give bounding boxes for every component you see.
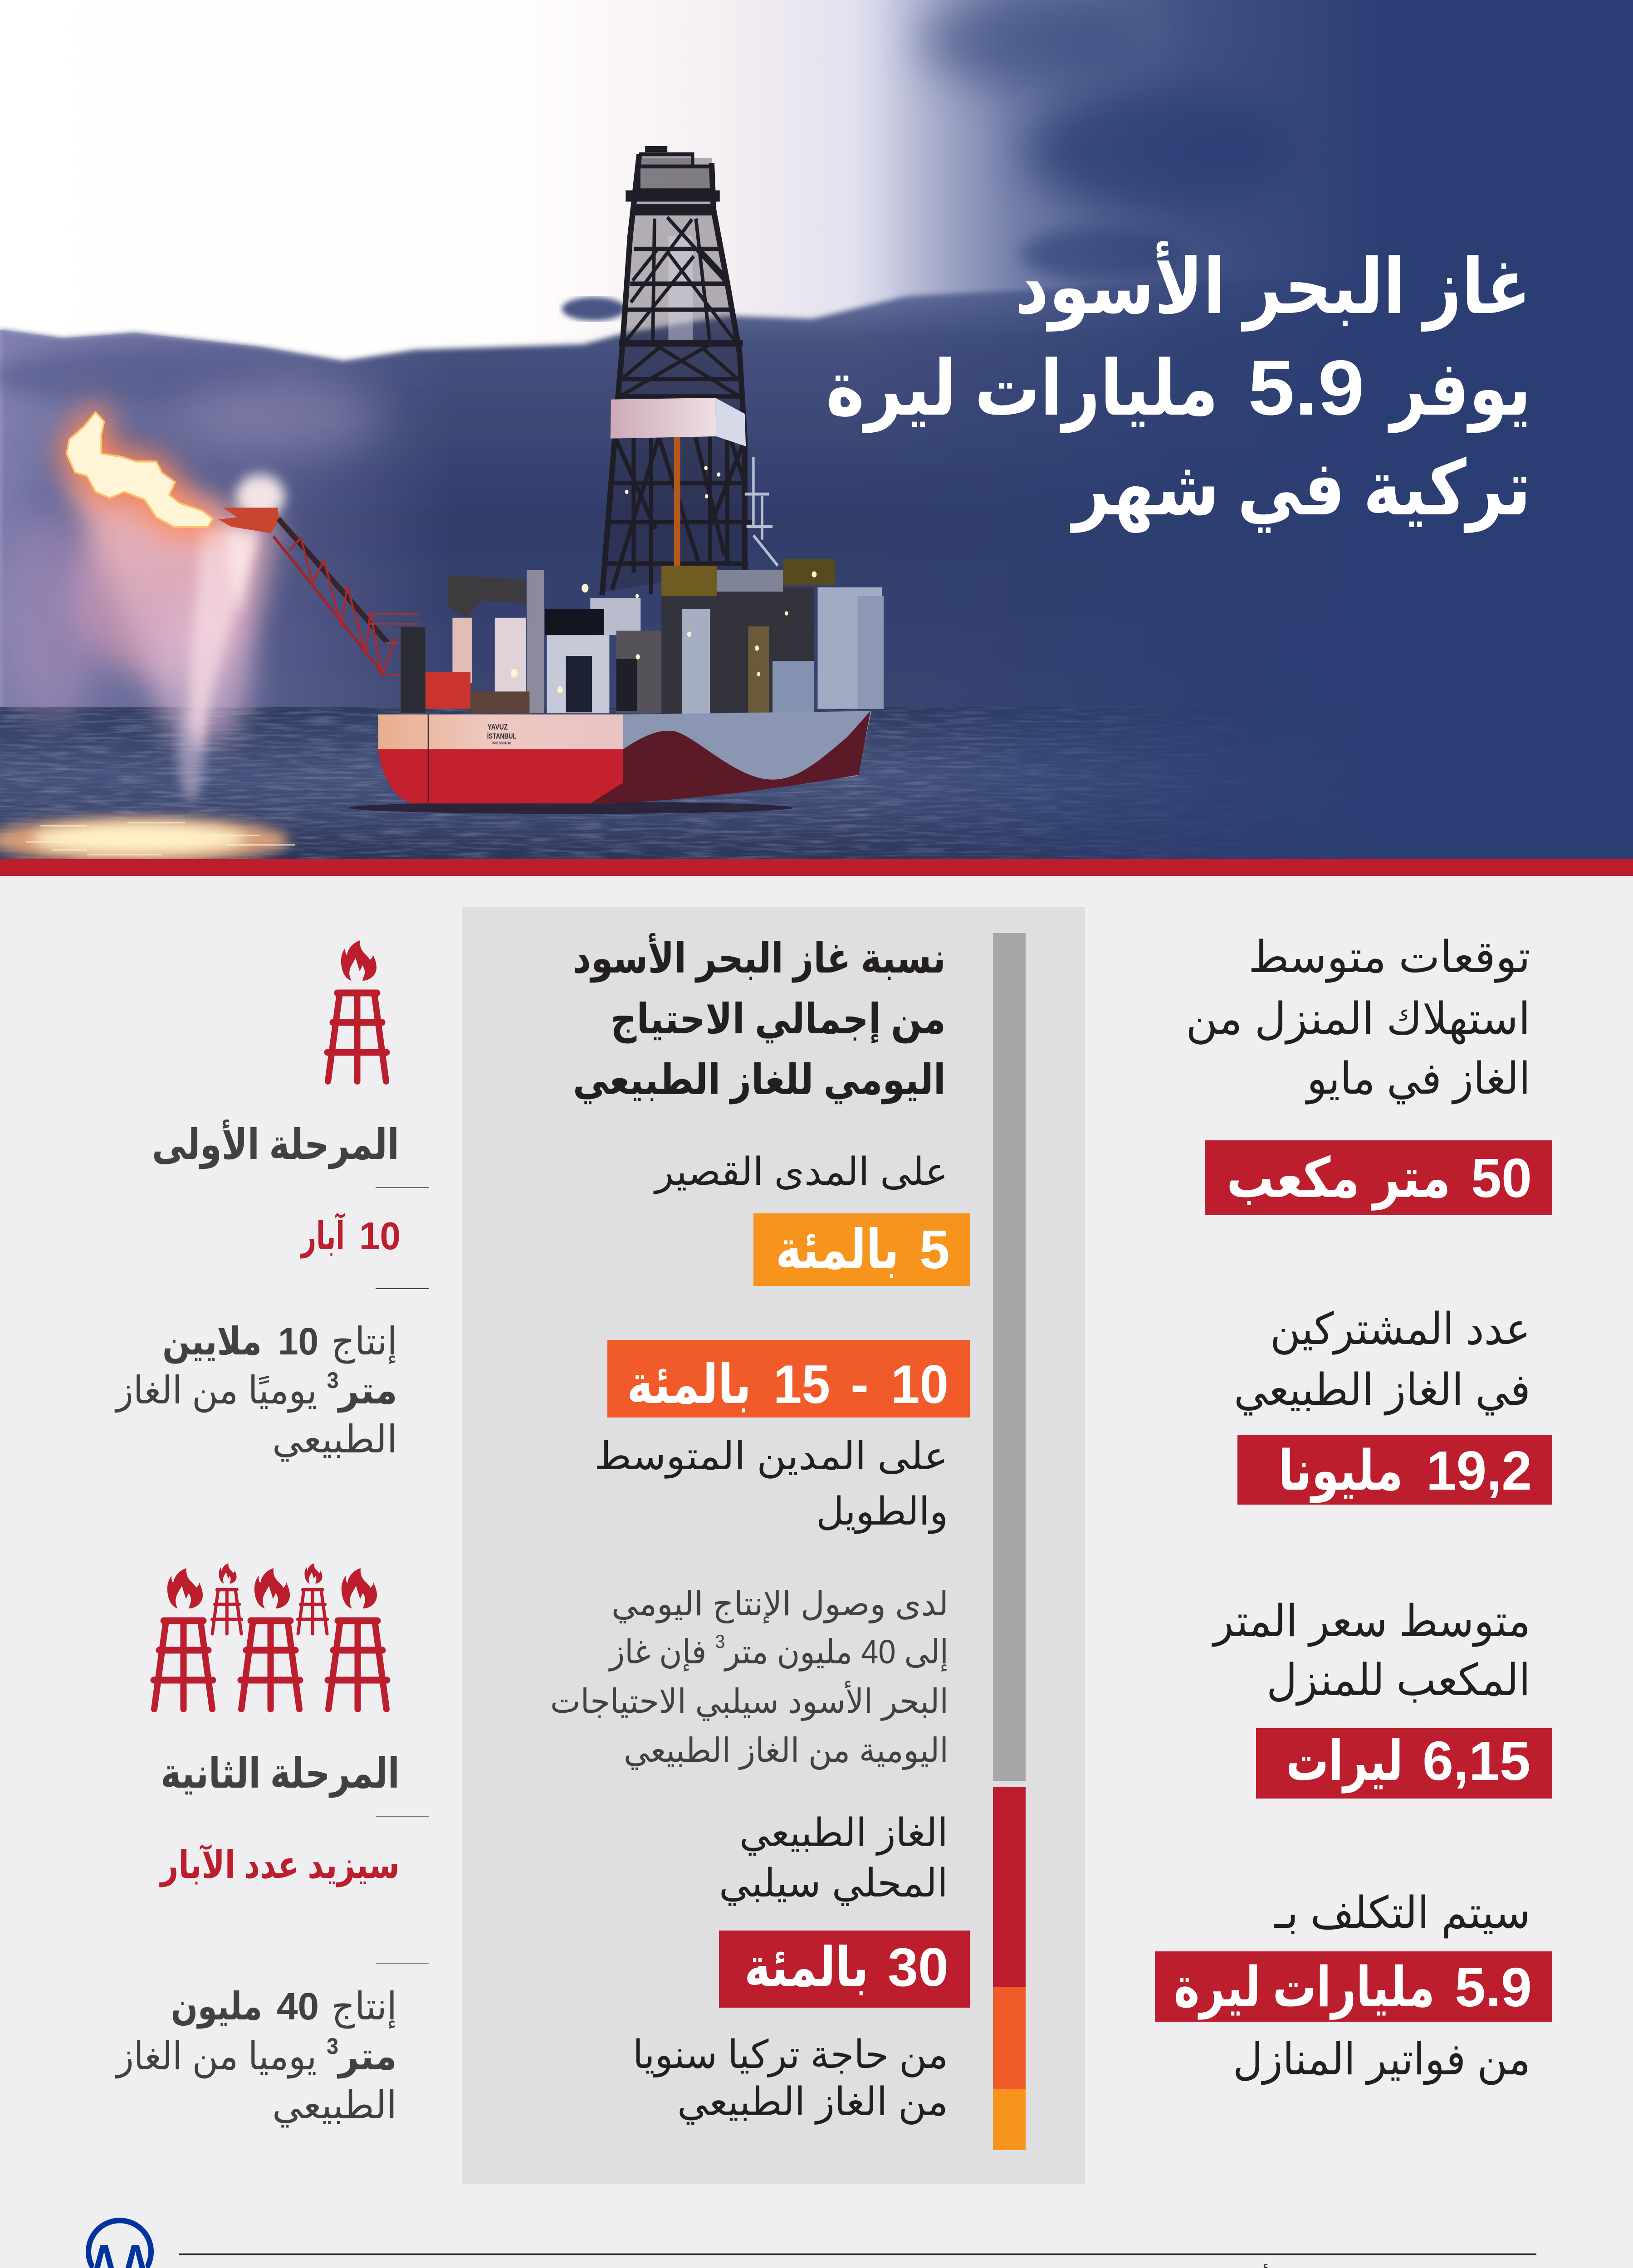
phase two: 40 xyxy=(277,1985,319,2028)
medium and long-term share: بالمئة xyxy=(627,1354,751,1415)
panel: share of Black Sea gas (centre) xyxy=(462,907,1085,2184)
footer xyxy=(88,2220,1539,2268)
phase two xyxy=(115,1563,429,2128)
panel heading: نسبة غاز البحر الأسود xyxy=(573,933,946,983)
annual share: من حاجة تركيا سنويا xyxy=(633,2033,948,2077)
stat: average price per cubic metre: المكعب للمنزل xyxy=(1266,1655,1530,1706)
drilling ship xyxy=(349,149,884,814)
stat: number of subscribers: 19,2 xyxy=(1426,1440,1532,1501)
stat: total bills covered: سيتم التكلف بـ xyxy=(1274,1888,1530,1938)
stat: expected monthly consumption xyxy=(1186,932,1552,1215)
stat: number of subscribers: مليونا xyxy=(1278,1440,1403,1503)
note on 40 million cubic metres: اليومية من الغاز الطبيعي xyxy=(624,1731,949,1770)
progress column xyxy=(993,933,1026,2150)
stat: average price per cubic metre xyxy=(1211,1596,1552,1799)
phase one: متر3 يوميًا من الغاز xyxy=(114,1368,397,1413)
stat: expected monthly consumption: توقعات متوسط xyxy=(1248,932,1530,983)
phase one xyxy=(114,940,429,1462)
medium and long-term share: والطويل xyxy=(816,1490,948,1534)
title: يوفر xyxy=(1388,346,1531,433)
note on 40 million cubic metres: البحر الأسود سيلبي الاحتياجات xyxy=(550,1681,949,1721)
logo: Anadolu Agency xyxy=(88,2220,151,2268)
phase two: الطبيعي xyxy=(272,2084,397,2128)
stat: expected monthly consumption: متر مكعب xyxy=(1227,1147,1451,1211)
annual share: 30 xyxy=(888,1937,949,1998)
red band under hero xyxy=(0,859,1633,876)
phase one: 10 xyxy=(278,1320,318,1363)
icon: single gas rig xyxy=(328,940,386,1081)
ship name: İSTANBUL xyxy=(487,732,517,741)
medium and long-term share: 10 xyxy=(891,1354,949,1415)
phase one: آبار xyxy=(300,1212,345,1259)
phase two: المرحلة الثانية xyxy=(161,1750,400,1798)
annual share: من الغاز الطبيعي xyxy=(677,2080,948,2125)
icon: multiple gas rigs xyxy=(154,1563,387,1709)
stat: expected monthly consumption: 50 xyxy=(1471,1147,1532,1209)
stat: total bills covered: 5.9 xyxy=(1455,1956,1532,2018)
note on 40 million cubic metres: لدى وصول الإنتاج اليومي xyxy=(611,1585,949,1623)
short-term share xyxy=(653,1150,970,1286)
annual share: بالمئة xyxy=(744,1937,869,1998)
title: تركية في شهر xyxy=(1070,445,1531,533)
ship name: YAVUZ xyxy=(488,723,508,732)
note on 40 million cubic metres xyxy=(550,1585,949,1770)
title: غاز البحر الأسود xyxy=(1015,241,1531,332)
medium and long-term share: 15 xyxy=(773,1354,830,1415)
panel heading xyxy=(573,933,946,1105)
phase one: 10 xyxy=(359,1215,401,1258)
annual share: الغاز الطبيعي xyxy=(739,1811,948,1856)
stat: total bills covered: مليارات ليرة xyxy=(1174,1956,1435,2020)
short-term share: 5 xyxy=(919,1219,950,1280)
title: 5.9 xyxy=(1248,344,1364,431)
phase two: متر3 يوميا من الغاز xyxy=(115,2033,397,2079)
ship name xyxy=(487,723,517,745)
medium and long-term share: - xyxy=(851,1354,869,1415)
phase one: ملايين xyxy=(162,1320,262,1364)
ship name: IMO 9503748 xyxy=(492,741,512,745)
derrick tower xyxy=(602,149,753,591)
short-term share: على المدى القصير xyxy=(653,1150,948,1194)
short-term share: بالمئة xyxy=(776,1219,899,1280)
stat: expected monthly consumption: الغاز في مايو xyxy=(1305,1054,1530,1105)
annual share: المحلي سيلبي xyxy=(719,1862,948,1906)
panel heading: اليومي للغاز الطبيعي xyxy=(573,1057,946,1105)
panel: production phases (left column) xyxy=(114,940,429,2128)
medium and long-term share xyxy=(594,1340,970,1534)
stat: number of subscribers: في الغاز الطبيعي xyxy=(1234,1365,1530,1416)
stat: average price per cubic metre: ليرات xyxy=(1286,1730,1403,1794)
phase two: سيزيد عدد الآبار xyxy=(159,1843,400,1887)
phase one: الطبيعي xyxy=(272,1418,397,1462)
hull xyxy=(623,711,871,787)
medium and long-term share: على المدين المتوسط xyxy=(594,1435,948,1479)
phase one: إنتاج xyxy=(331,1320,397,1364)
title: مليارات ليرة xyxy=(826,346,1218,433)
phase two: مليون xyxy=(171,1985,262,2029)
phase one: المرحلة الأولى xyxy=(152,1119,399,1169)
panel heading: من إجمالي الاحتياج xyxy=(611,996,946,1044)
annual share xyxy=(633,1811,970,2125)
hero photo: drilling ship at dusk xyxy=(0,0,1633,863)
flare: boom, flame, steam and reflection xyxy=(0,412,425,863)
stat: total bills covered: من فواتير المنازل xyxy=(1233,2034,1530,2085)
phase two: إنتاج xyxy=(332,1985,397,2029)
stat: average price per cubic metre: 6,15 xyxy=(1423,1730,1530,1792)
stat: total bills covered xyxy=(1155,1888,1552,2085)
note on 40 million cubic metres: إلى 40 مليون متر3 فإن غاز xyxy=(608,1631,949,1672)
stat: number of subscribers: عدد المشتركين xyxy=(1270,1304,1530,1355)
stat: average price per cubic metre: متوسط سعر المتر xyxy=(1211,1596,1530,1647)
panel: household statistics (right column) xyxy=(1155,932,1552,2085)
deck equipment xyxy=(661,587,814,715)
stat: expected monthly consumption: استهلاك المنزل من xyxy=(1186,994,1530,1045)
stat: number of subscribers xyxy=(1234,1304,1552,1505)
title xyxy=(826,241,1531,533)
